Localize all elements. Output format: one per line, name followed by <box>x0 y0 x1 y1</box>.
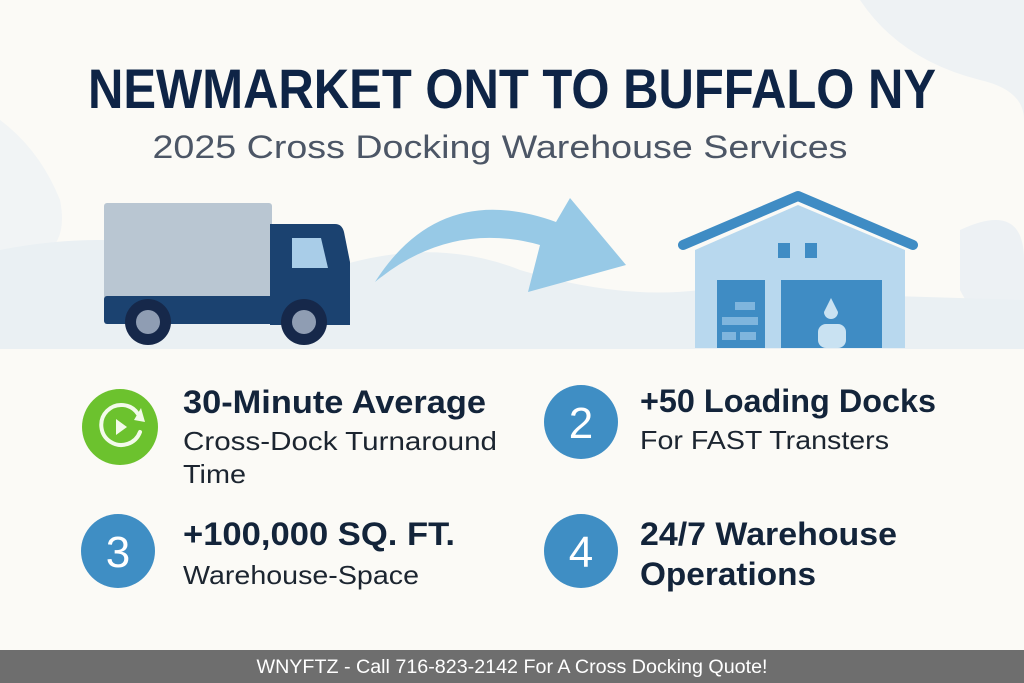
item 1: 30-minute: Time <box>183 459 246 489</box>
item 4: 24/7: 24/7 Warehouse <box>640 516 897 552</box>
item 1: 30-minute <box>82 384 497 489</box>
item 2: loading docks: 2 <box>569 399 593 448</box>
item 2: loading docks: For FAST Transters <box>640 425 889 455</box>
item 4: 24/7: 4 <box>569 528 593 577</box>
icon: truck <box>104 203 350 345</box>
arrow <box>375 198 626 292</box>
footer bar <box>0 650 1024 683</box>
item 1: 30-minute: 30-Minute Average <box>183 384 486 420</box>
item 3: square feet: +100,000 SQ. FT. <box>183 516 455 552</box>
item 2: loading docks: +50 Loading Docks <box>640 383 936 419</box>
item 4: 24/7: Operations <box>640 556 816 592</box>
item 4: 24/7 <box>544 514 897 592</box>
item 1: 30-minute: Cross-Dock Turnaround <box>183 426 497 456</box>
footer bar: WNYFTZ - Call 716-823-2142 For A Cross Docking Quote! <box>256 657 768 678</box>
item 3: square feet <box>81 514 455 590</box>
subtitle: 2025 Cross Docking Warehouse Services <box>152 129 848 165</box>
item 2: loading docks <box>544 383 936 459</box>
item 3: square feet: 3 <box>106 528 130 577</box>
item 3: square feet: Warehouse-Space <box>183 560 419 590</box>
icon: warehouse <box>683 196 913 348</box>
